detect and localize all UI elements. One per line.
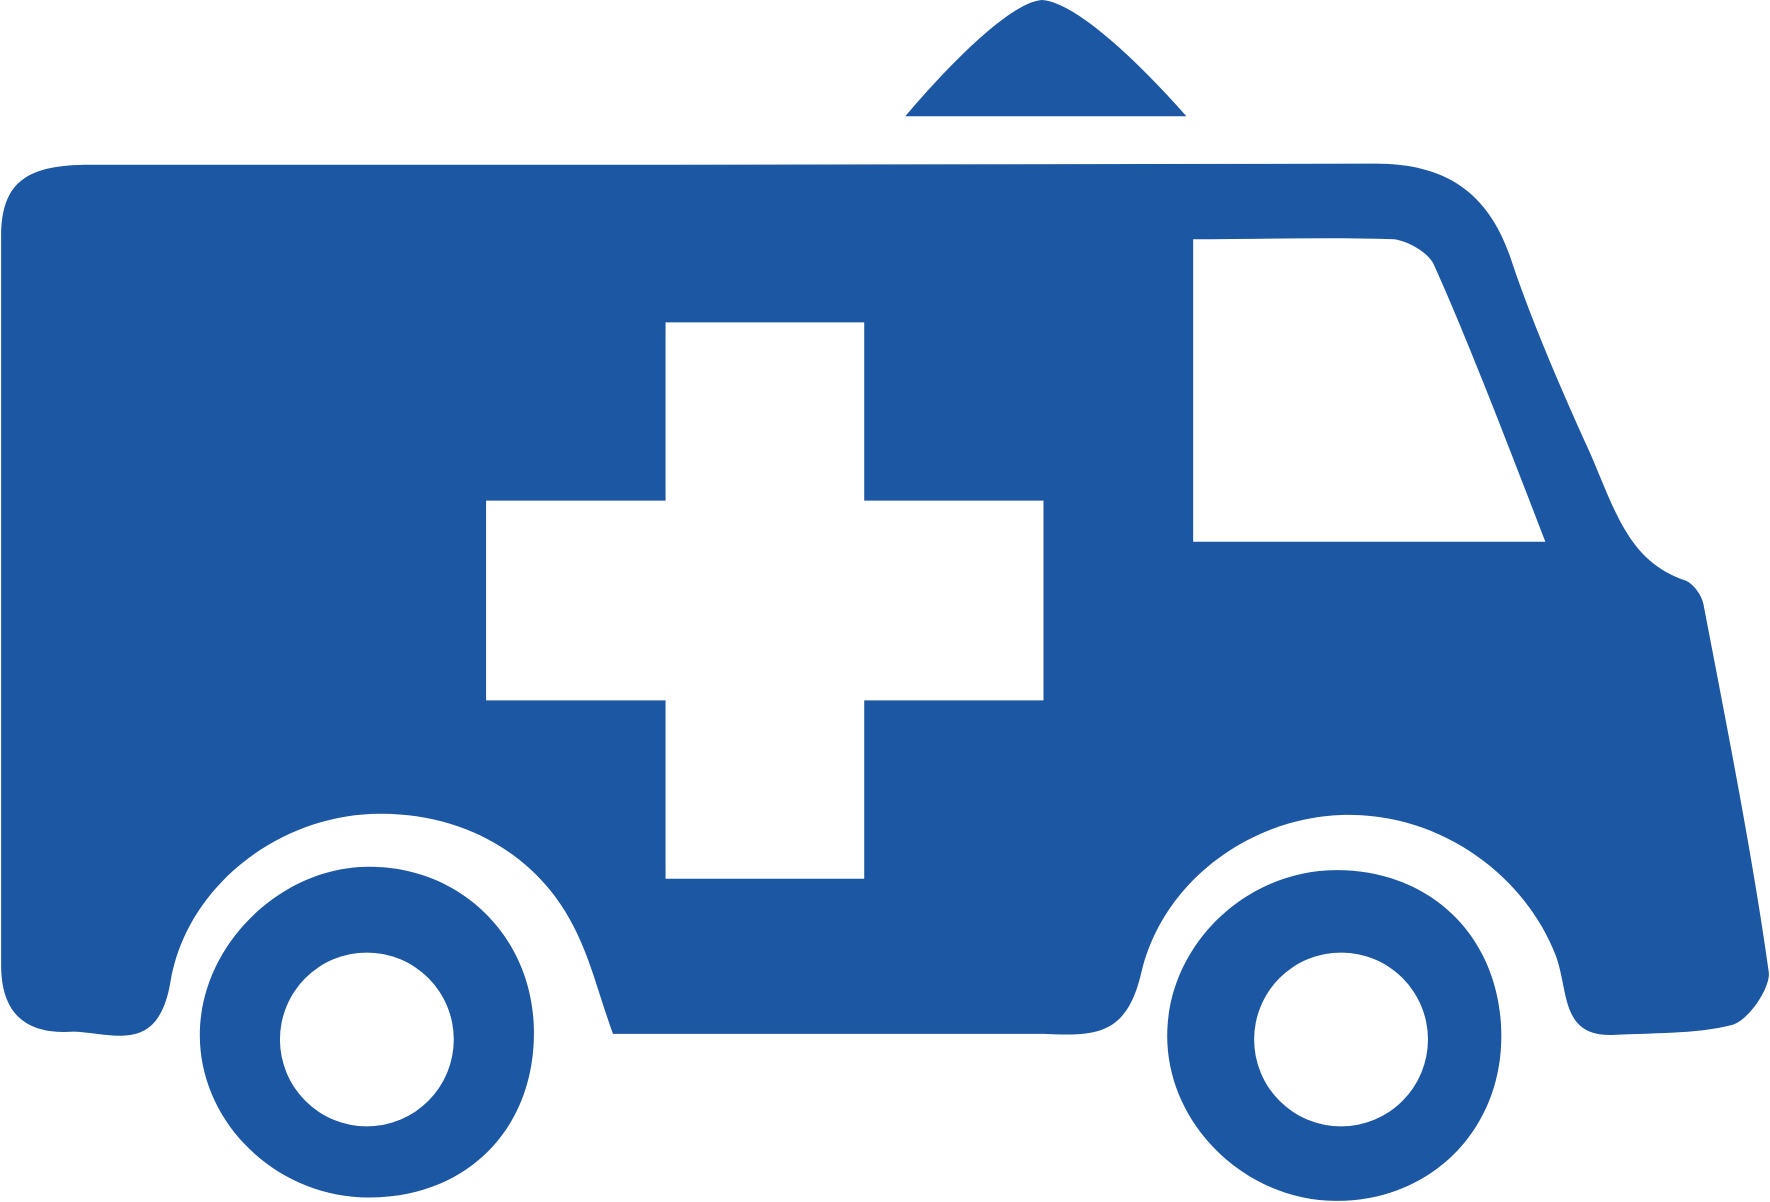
- icon: rear wheel: [200, 867, 534, 1197]
- icon: front wheel: [1167, 870, 1501, 1201]
- ambulance body with cross and window cut-outs: [1, 164, 1769, 1036]
- icon: roof beacon: [905, 0, 1186, 116]
